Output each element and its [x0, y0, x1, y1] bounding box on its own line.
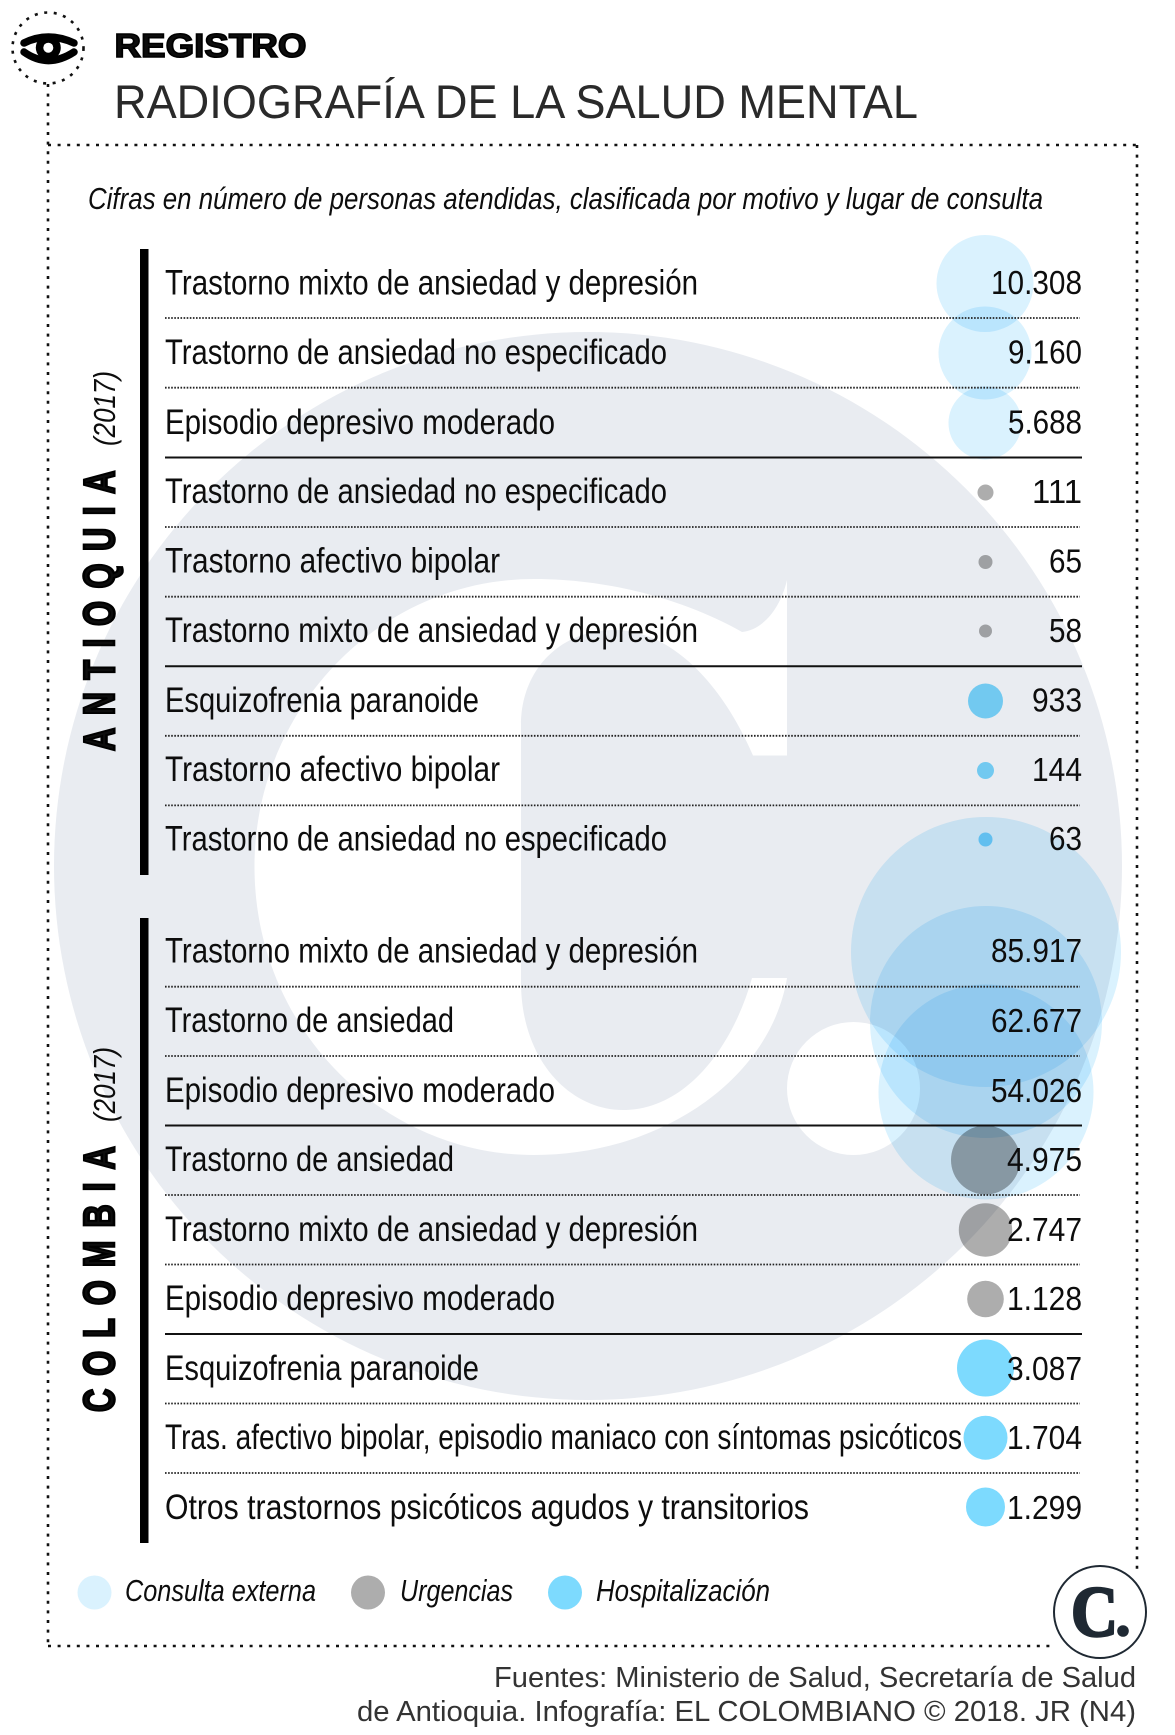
row: episodio 5.688: 5.688 — [1008, 404, 1082, 442]
bubble: 9.160 consulta externa — [938, 306, 1032, 400]
row: esquizofrenia 3.087: Esquizofrenia paranoide — [165, 1349, 479, 1388]
row: mixto 85.917: 85.917 — [991, 933, 1082, 970]
row: ansiedad 111: Trastorno de ansiedad no especificado — [165, 472, 667, 511]
row: ansiedad 4.975: 4.975 — [1007, 1142, 1082, 1179]
logo: El Colombiano C.: C — [1071, 1572, 1118, 1652]
row: mixto 85.917: Trastorno mixto de ansiedad y depresión — [165, 932, 698, 970]
row: esquizofrenia 933: 933 — [1032, 682, 1082, 720]
bubble: 58 urgencias — [979, 624, 992, 638]
row: ansiedad 9.160 — [165, 333, 1082, 372]
row: bipolar 144: Trastorno afectivo bipolar — [165, 750, 500, 789]
table rows: Antioquia — [165, 264, 1082, 858]
bubble: 54.026 consulta externa — [878, 984, 1094, 1200]
bubbles: Colombia — [851, 817, 1121, 1526]
row: ansiedad 111: 111 — [1032, 474, 1082, 511]
row: mixto 2.747: 2.747 — [1007, 1212, 1082, 1249]
heading: registro: REGISTRO — [114, 27, 306, 64]
row: mixto 58: Trastorno mixto de ansiedad y depresión — [165, 611, 698, 650]
section label: Antioquia: ANTIOQUIA — [75, 471, 124, 751]
table rows: Colombia — [165, 932, 1082, 1527]
row: mixto 2.747 — [165, 1210, 1082, 1249]
row: mixto 2.747: Trastorno mixto de ansiedad y depresión — [165, 1210, 698, 1249]
bubble: 3.087 hospitalización — [957, 1340, 1014, 1396]
row: ansiedad 4.975 — [165, 1140, 1082, 1179]
row: esquizofrenia 933 — [165, 681, 1082, 720]
bubble: 5.688 consulta externa — [948, 386, 1022, 460]
bubble: 1.704 hospitalización — [964, 1416, 1008, 1460]
row: episodio 1.128 — [165, 1279, 1082, 1318]
row: episodio 5.688: Episodio depresivo moderado — [165, 403, 555, 442]
row: esquizofrenia 3.087: 3.087 — [1007, 1351, 1082, 1388]
row: bipolar 144: 144 — [1032, 752, 1082, 789]
row: episodio 54.026 — [165, 1071, 1082, 1110]
bubble: 1.299 hospitalización — [966, 1488, 1005, 1526]
row: mixto 85.917 — [165, 932, 1082, 970]
bubble: 144 hospitalización — [977, 762, 994, 779]
row: ansiedad 9.160: 9.160 — [1008, 334, 1082, 372]
row: bipolar 65: 65 — [1049, 544, 1082, 580]
section label: Colombia: COLOMBIA — [75, 1146, 124, 1412]
row: episodio 5.688 — [165, 403, 1082, 442]
row: episodio 1.128: 1.128 — [1007, 1281, 1082, 1318]
section label: Colombia — [75, 918, 148, 1543]
bubble: 933 hospitalización — [968, 684, 1003, 718]
row: ansiedad 62.677: 62.677 — [991, 1003, 1082, 1040]
row: ansiedad 62.677 — [165, 1001, 1082, 1040]
row: ansiedad 63 — [165, 820, 1082, 858]
section label: Antioquia — [75, 249, 148, 875]
row: ansiedad 63: Trastorno de ansiedad no especificado — [165, 820, 667, 858]
bubble: 1.128 urgencias — [967, 1281, 1004, 1317]
row: ansiedad 4.975: Trastorno de ansiedad — [165, 1140, 454, 1179]
row: mixto 10.308: 10.308 — [991, 265, 1082, 302]
legend: Urgencias — [400, 1573, 513, 1608]
logo: El Colombiano C. — [1054, 1566, 1146, 1658]
row: mixto 10.308 — [165, 264, 1082, 302]
row: esquizofrenia 3.087 — [165, 1349, 1082, 1388]
row: episodio 54.026: Episodio depresivo moderado — [165, 1071, 555, 1110]
row: esquizofrenia 933: Esquizofrenia paranoide — [165, 681, 479, 720]
row: episodio 54.026: 54.026 — [991, 1073, 1082, 1110]
bubble: 63 hospitalización — [978, 832, 992, 846]
bubble: 4.975 urgencias — [951, 1126, 1020, 1194]
row: mixto 58 — [165, 611, 1082, 650]
legend: Hospitalización — [596, 1573, 770, 1608]
legend: Consulta externa — [125, 1573, 316, 1608]
row: mixto 10.308: Trastorno mixto de ansiedad y depresión — [165, 264, 698, 302]
legend — [78, 1573, 770, 1610]
row: otros 1.299: 1.299 — [1007, 1490, 1082, 1527]
bubble: 65 urgencias — [978, 555, 992, 569]
row: episodio 1.128: Episodio depresivo moderado — [165, 1279, 555, 1318]
watermark: El Colombiano logo — [54, 332, 1122, 1400]
row: ansiedad 111 — [165, 472, 1082, 511]
row: ansiedad 9.160: Trastorno de ansiedad no especificado — [165, 333, 667, 372]
row: bipolar 144 — [165, 750, 1082, 789]
section label: Antioquia: (2017) — [87, 371, 122, 446]
bubble: 10.308 consulta externa — [936, 235, 1034, 332]
row: mixto 58: 58 — [1049, 613, 1082, 650]
source credits: Fuentes: Ministerio de Salud, Secretaría de Salud — [494, 1662, 1136, 1694]
row: ansiedad 62.677: Trastorno de ansiedad — [165, 1001, 454, 1040]
row: bipolar 65: Trastorno afectivo bipolar — [165, 542, 500, 580]
row: bipolar maniaco 1.704: Tras. afectivo bipolar, episodio maniaco con síntomas psicóticos — [165, 1418, 962, 1457]
row: otros 1.299: Otros trastornos psicóticos agudos y transitorios — [165, 1488, 809, 1527]
source credits — [357, 1662, 1136, 1728]
row: bipolar maniaco 1.704: 1.704 — [1007, 1420, 1082, 1457]
section label: Colombia: (2017) — [87, 1047, 122, 1122]
bubble: 85.917 consulta externa — [851, 817, 1121, 1087]
bubble: 62.677 consulta externa — [870, 906, 1102, 1138]
title: RADIOGRAFÍA DE LA SALUD MENTAL — [114, 75, 918, 128]
row: bipolar 65 — [165, 542, 1082, 580]
bubbles: Antioquia — [936, 235, 1034, 846]
row: ansiedad 63: 63 — [1049, 821, 1082, 858]
bubble: 2.747 urgencias — [959, 1203, 1012, 1257]
source credits: de Antioquia. Infografía: EL COLOMBIANO © 2018. JR (N4) — [357, 1696, 1136, 1728]
icon: eye in dotted circle — [12, 12, 84, 84]
bubble: 111 urgencias — [978, 484, 994, 500]
